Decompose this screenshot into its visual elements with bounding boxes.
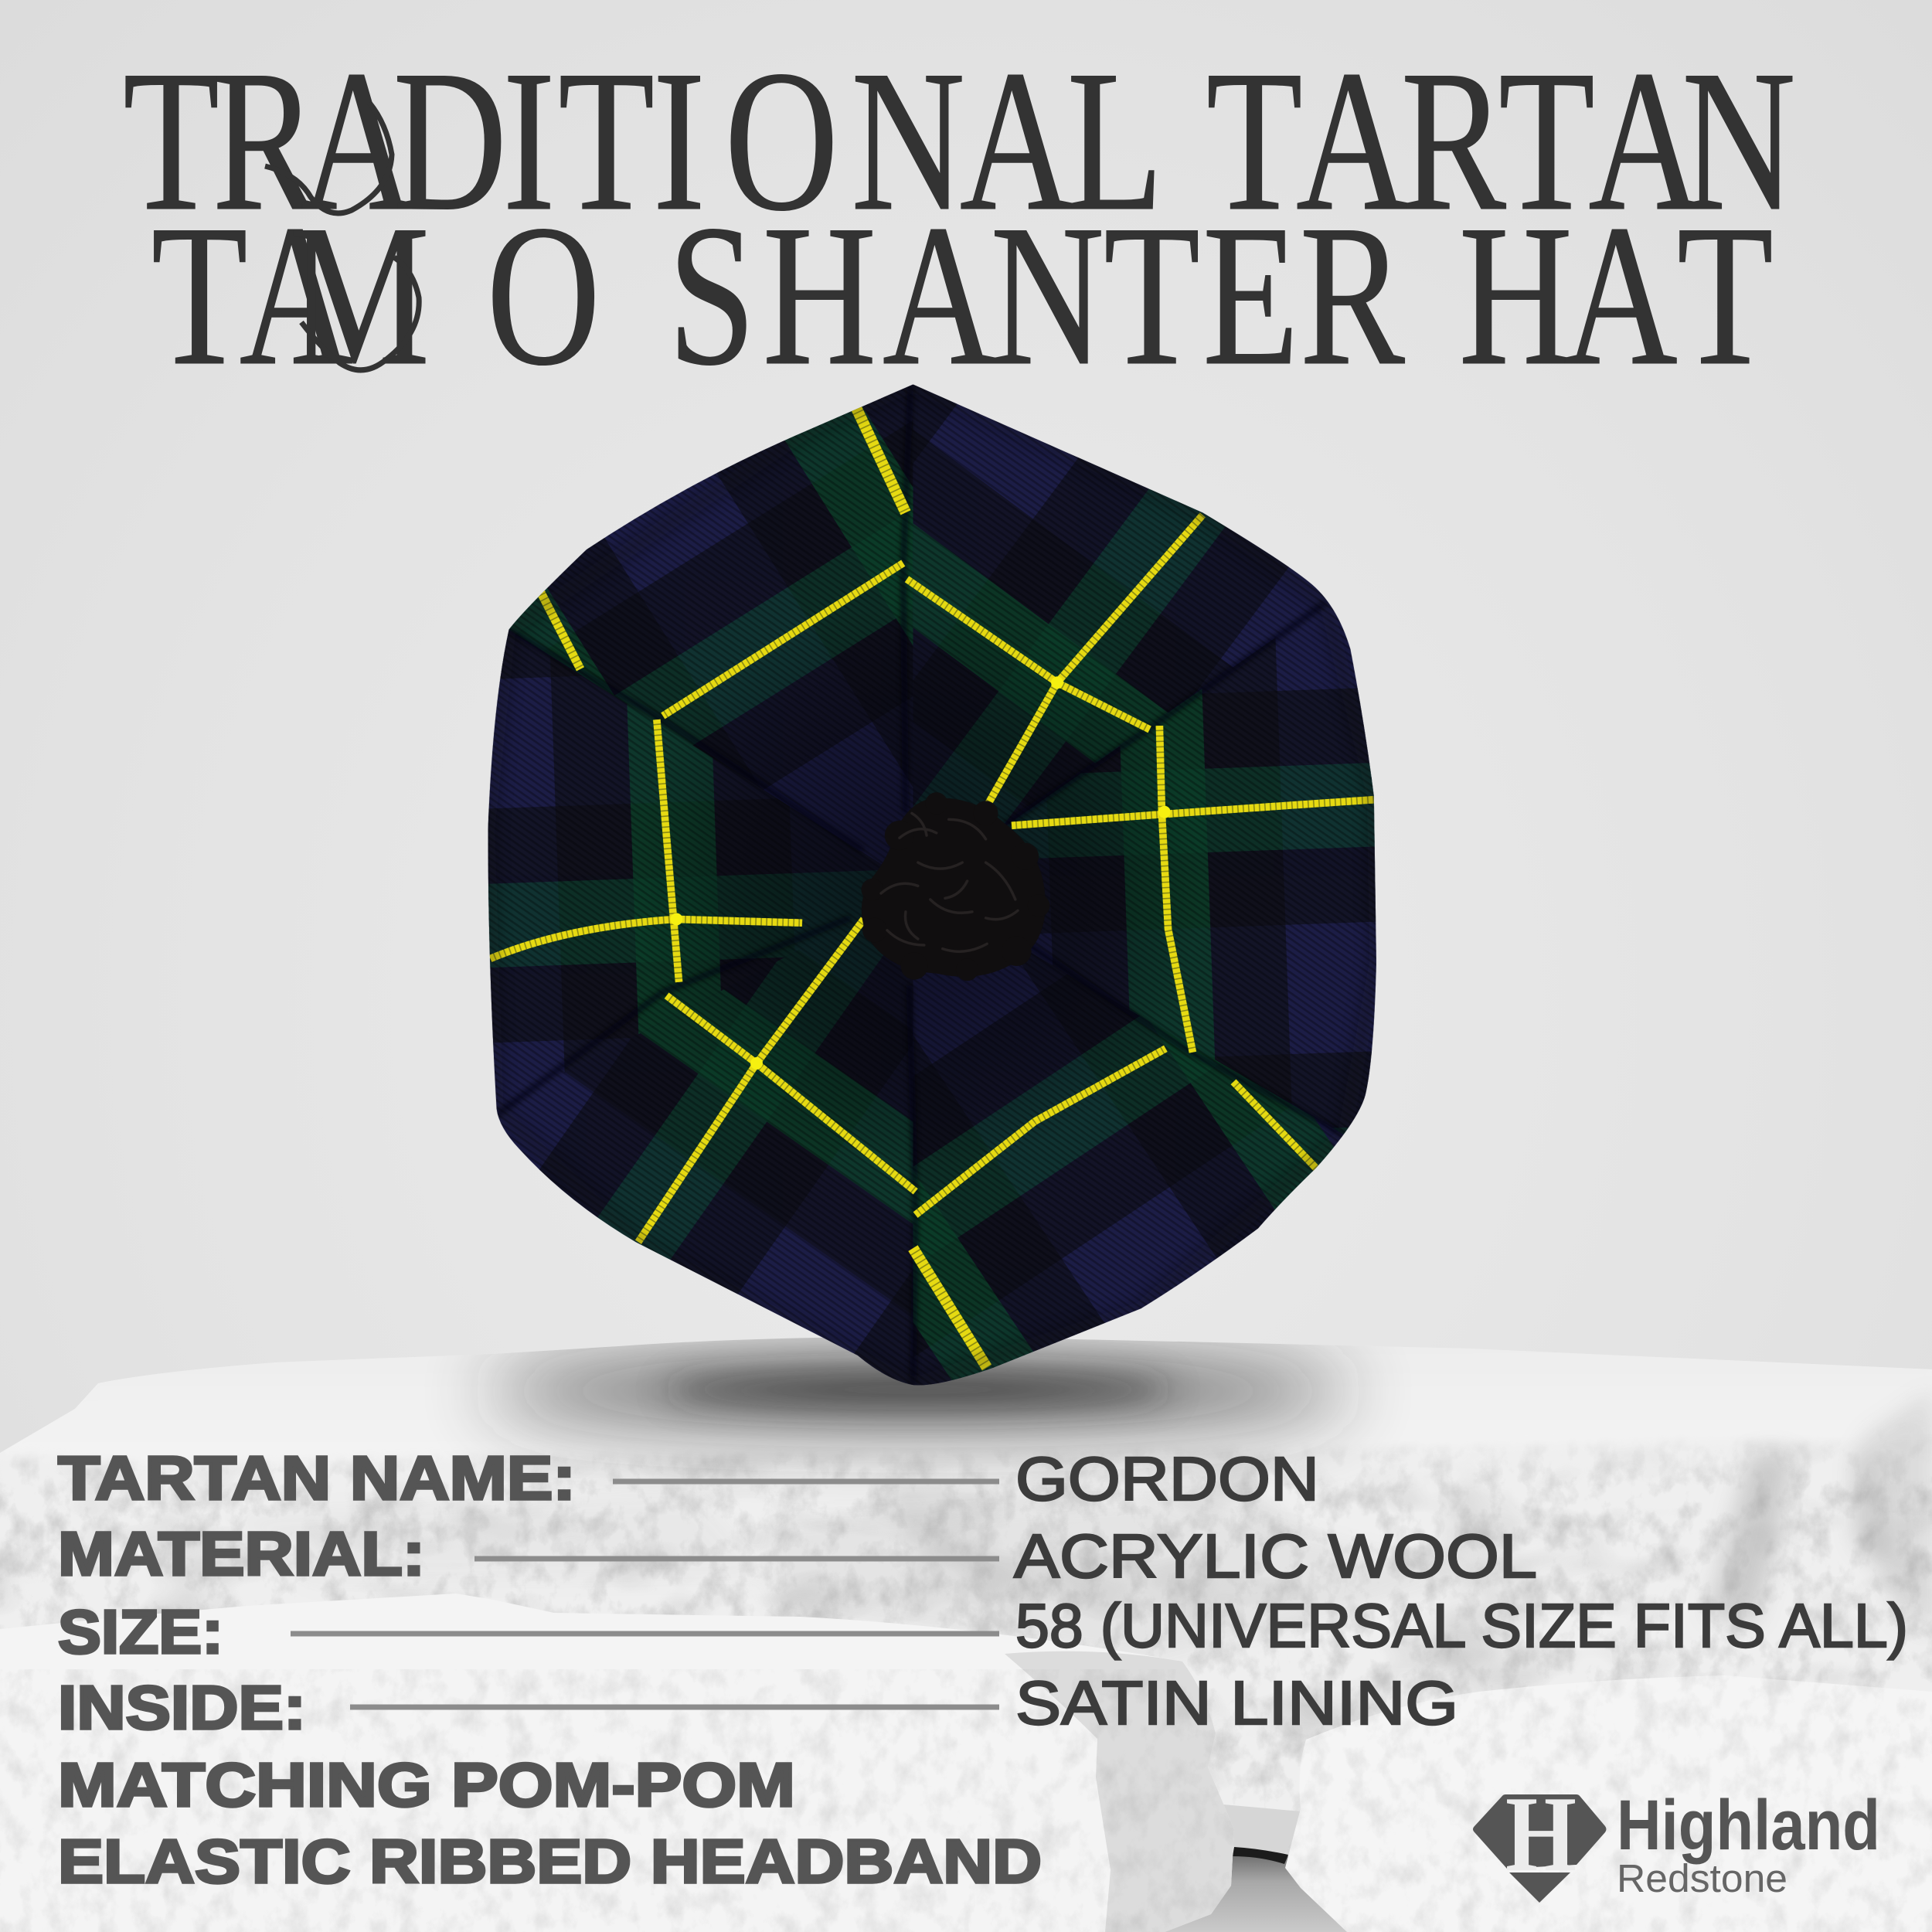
hat: right panel sett (719, 366, 1611, 1258)
hat: pom-pom (861, 792, 1049, 981)
podium: slab surface blotches (0, 1448, 1932, 1856)
podium: large back slab (0, 1337, 1932, 1932)
spec row: tartan name: TARTAN NAME: (58, 1444, 576, 1512)
hat: edge shading (488, 384, 1376, 1385)
podium: hat shadow (485, 1359, 1351, 1423)
hat: bottom-right panel sett (301, 628, 1498, 1824)
hat: twill weave texture (468, 369, 1405, 1405)
hat: yellow overcheck lines (491, 403, 1374, 1368)
podium: back slab side shading (232, 1391, 1932, 1662)
stone podium (0, 1321, 1932, 1932)
title: swash on second line M (301, 257, 419, 370)
spec row: tartan name: GORDON (1015, 1444, 1319, 1513)
spec: matching pom-pom: MATCHING POM-POM (58, 1750, 795, 1819)
spec row: inside: INSIDE: (58, 1673, 306, 1742)
spec: elastic ribbed headband: ELASTIC RIBBED HEADBAND (58, 1827, 1042, 1896)
hat: bright crossing points (670, 676, 1171, 1070)
spec row: tartan name (58, 1444, 1319, 1513)
hat: top-right panel sett (913, 385, 1289, 825)
spec row: inside (58, 1668, 1458, 1742)
spec row: material: MATERIAL: (58, 1519, 425, 1588)
specification list (58, 1444, 1908, 1896)
logo: wordmark Redstone: Redstone (1617, 1856, 1787, 1900)
podium: floor between stones (1144, 1855, 1368, 1932)
podium: front-left stone side face (1005, 1651, 1234, 1932)
spec row: size: SIZE: (58, 1597, 223, 1666)
podium: recessed step under back slab (1223, 1804, 1310, 1853)
podium: dark contact shadow (1233, 1847, 1288, 1864)
title: second line: TAM O SHANTER HAT (151, 183, 1774, 407)
logo: wordmark Highland: Highland (1617, 1786, 1880, 1865)
title (123, 29, 1796, 407)
spec row: size (58, 1591, 1908, 1666)
logo (1473, 1774, 1880, 1903)
hat: left panel sett (230, 473, 1123, 1366)
spec row: material: ACRYLIC WOOL (1014, 1522, 1537, 1590)
podium: slab top surface (26, 1423, 1839, 1463)
podium: front-left stone (0, 1594, 1234, 1932)
logo: gem mark (1473, 1774, 1606, 1903)
spec row: inside: SATIN LINING (1015, 1668, 1458, 1737)
title: swash on first line A (265, 103, 392, 213)
podium: slab surface grain (0, 1444, 1932, 1852)
spec row: size: 58 (UNIVERSAL SIZE FITS ALL) (1015, 1591, 1908, 1660)
title: first line: TRADITIONAL TARTAN (123, 29, 1796, 253)
hat: bottom-left panel sett (156, 463, 1357, 1664)
hat: navy base cloth (468, 369, 1405, 1405)
spec row: material (58, 1519, 1537, 1590)
tartan hat (488, 385, 1376, 1385)
hat: centre gather shading (634, 604, 1202, 1171)
logo: gem mark: H (1505, 1774, 1577, 1894)
hat: top-left panel sett (509, 385, 913, 790)
podium: front-right stone (1285, 1675, 1932, 1932)
podium: stones grain (0, 1669, 1932, 1932)
hat: pleat seams (497, 384, 1344, 1385)
